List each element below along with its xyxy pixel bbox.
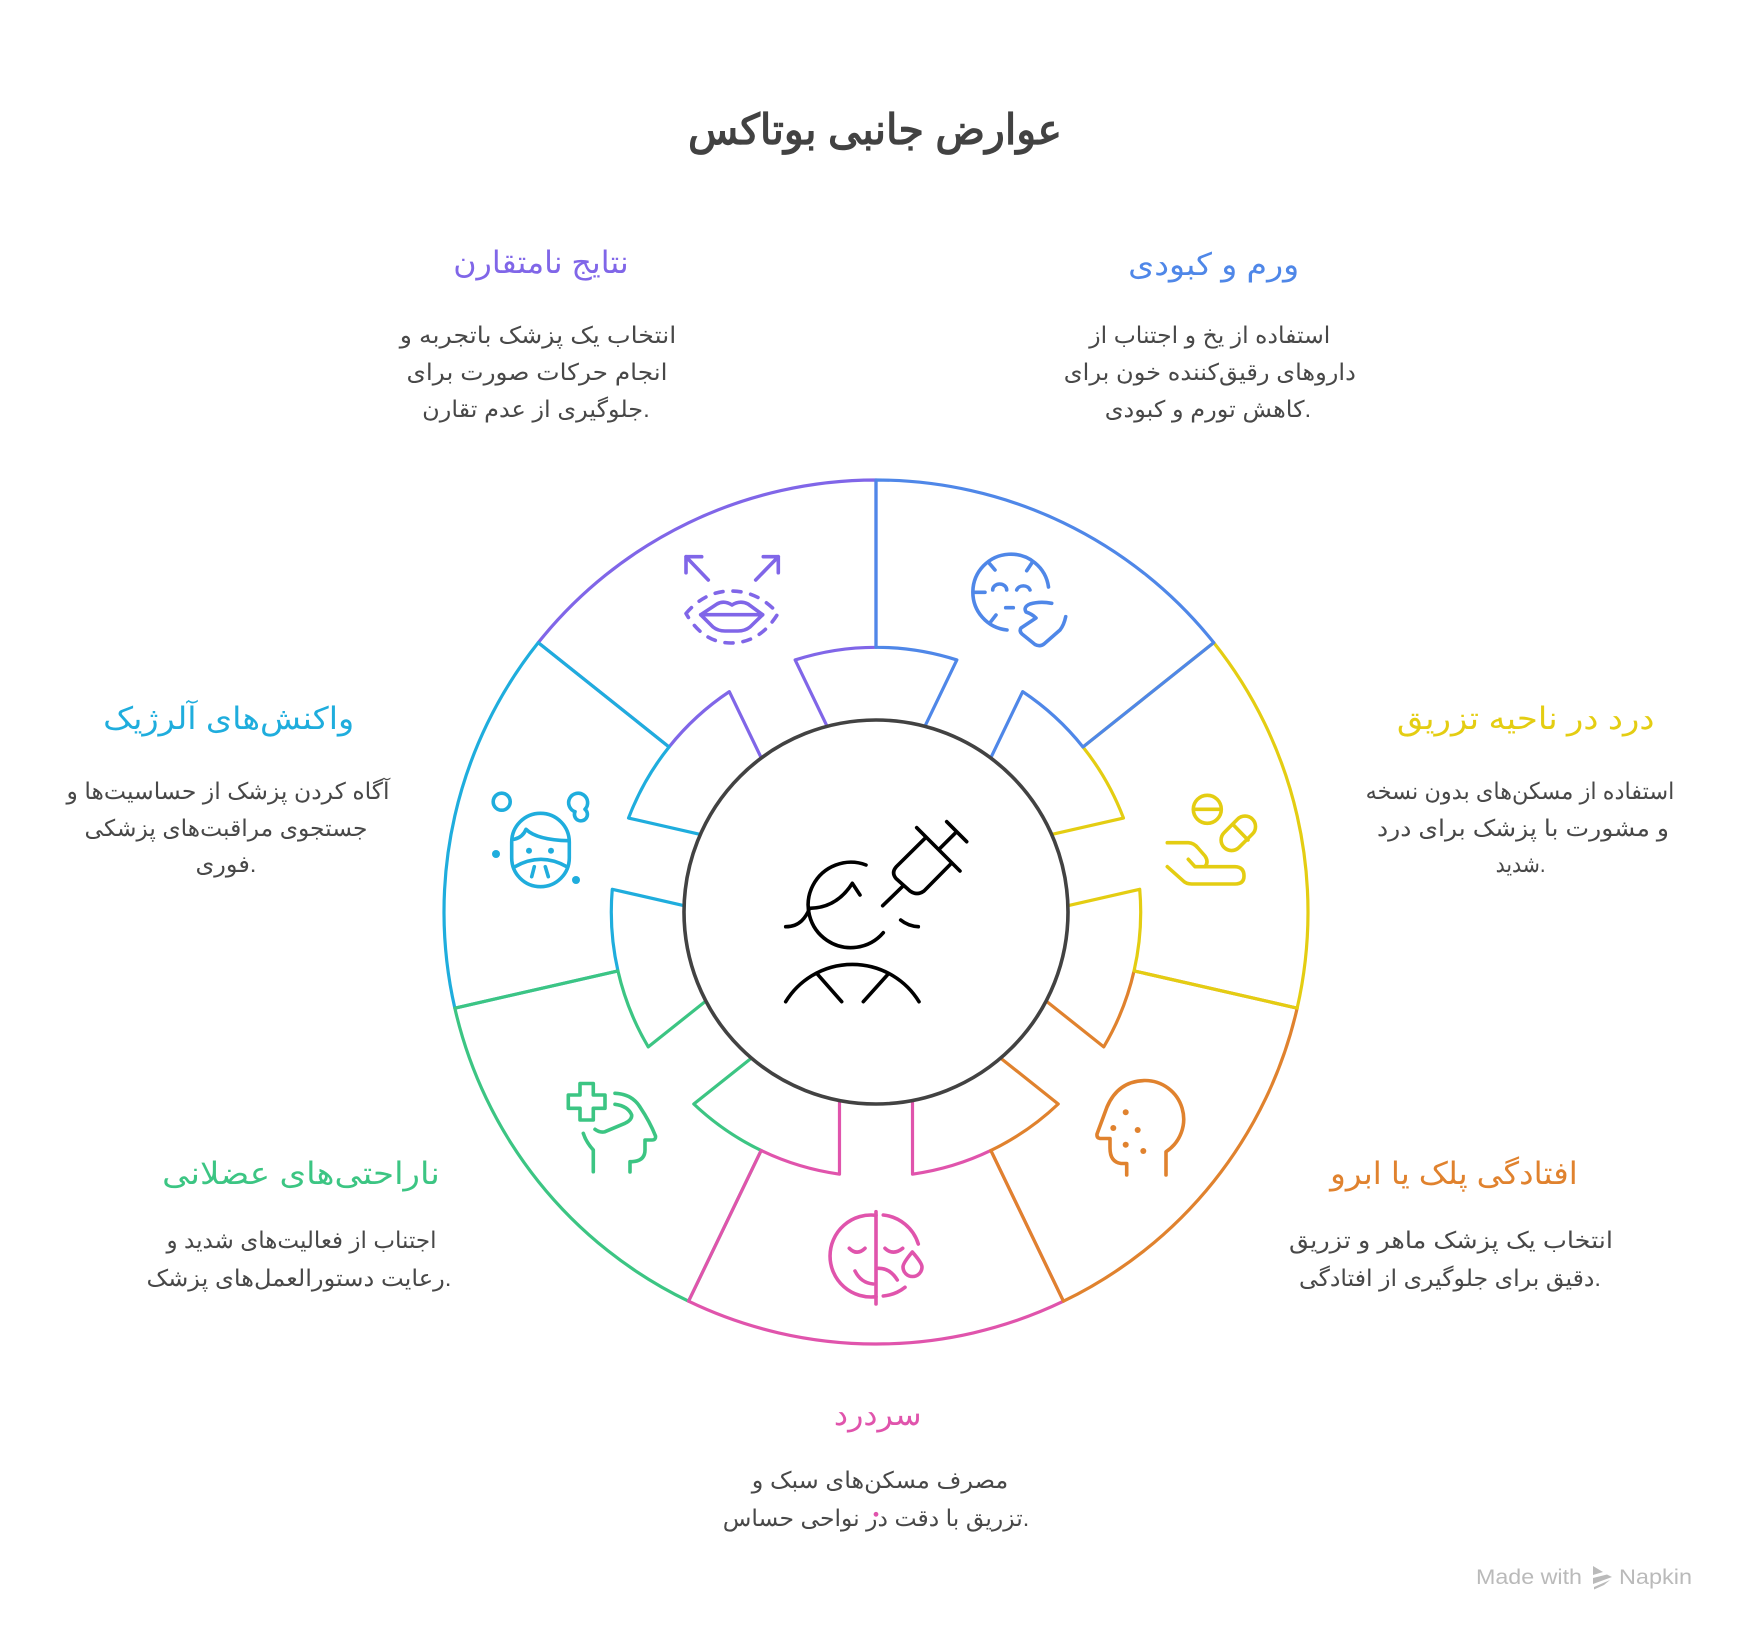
heading: واکنش‌های آلرژیک xyxy=(103,699,354,737)
body: فوری. xyxy=(196,851,256,878)
body: داروهای رقیق‌کننده خون برای xyxy=(1064,359,1356,386)
body xyxy=(399,322,676,423)
body: دقیق برای جلوگیری از افتادگی. xyxy=(1299,1265,1601,1292)
body: شدید. xyxy=(1496,851,1546,877)
heading: افتادگی پلک یا ابرو xyxy=(1328,1156,1578,1192)
body: رعایت دستورالعمل‌های پزشک. xyxy=(146,1265,451,1292)
body: و مشورت با پزشک برای درد xyxy=(1377,815,1669,842)
wheel diagram xyxy=(380,379,1424,1448)
segment: injection site pain (yellow) xyxy=(996,643,1424,1080)
body: آگاه کردن پزشک از حساسیت‌ها و xyxy=(65,777,391,805)
icon: swollen face xyxy=(973,554,1066,646)
text block: swelling and bruising xyxy=(1064,247,1356,423)
icon: allergic face xyxy=(492,793,588,887)
body xyxy=(65,777,391,878)
body xyxy=(1366,778,1674,877)
heading: سردرد xyxy=(834,1397,922,1433)
icon: face and syringe xyxy=(786,822,967,1002)
body: انتخاب یک پزشک ماهر و تزریق xyxy=(1289,1227,1613,1254)
logo mark xyxy=(1593,1566,1612,1590)
icon: half smiling half crying face xyxy=(830,1212,922,1304)
heading: ناراحتی‌های عضلانی xyxy=(162,1156,440,1192)
text block: headache xyxy=(723,1397,1029,1532)
heading: درد در ناحیه تزریق xyxy=(1397,701,1654,737)
segment: eyelid or brow droop (orange) xyxy=(951,946,1297,1337)
body: تزریق با دقت در نواحی حساس. xyxy=(723,1505,1029,1532)
body: کاهش تورم و کبودی. xyxy=(1105,396,1311,423)
watermark: made with napkin: Napkin xyxy=(1619,1566,1692,1589)
watermark: made with napkin xyxy=(1476,1566,1692,1590)
text block: injection site pain xyxy=(1366,701,1674,877)
center circle xyxy=(684,720,1068,1104)
heading: ورم و کبودی xyxy=(1128,247,1299,283)
watermark: made with napkin: Made with xyxy=(1476,1566,1582,1589)
segment: headache (pink) xyxy=(639,1051,1063,1448)
body xyxy=(1289,1227,1613,1292)
heading: نتایج نامتقارن xyxy=(453,245,629,281)
text block: muscle discomfort xyxy=(146,1156,451,1292)
body: استفاده از مسکن‌های بدون نسخه xyxy=(1366,778,1674,805)
body xyxy=(146,1227,451,1292)
title: عوارض جانبی بوتاکس xyxy=(688,106,1062,155)
body: استفاده از یخ و اجتناب از xyxy=(1088,322,1330,349)
body: مصرف مسکن‌های سبک و xyxy=(751,1467,1008,1494)
body: اجتناب از فعالیت‌های شدید و xyxy=(165,1227,437,1254)
body: جلوگیری از عدم تقارن. xyxy=(422,396,650,423)
text block: unbalanced results xyxy=(399,245,676,423)
icon: lips with arrows xyxy=(686,557,778,643)
icon: head with medical cross xyxy=(568,1084,656,1172)
segment: unbalanced results (purple) xyxy=(538,379,966,816)
segment: swelling and bruising (blue) xyxy=(876,480,1214,758)
body: انتخاب یک پزشک باتجربه و xyxy=(399,322,676,349)
icon: hand with pills xyxy=(1167,795,1260,884)
segment: muscle discomfort (green) xyxy=(384,904,809,1301)
body xyxy=(723,1467,1029,1532)
segment: allergic reactions (cyan) xyxy=(380,617,726,1008)
body xyxy=(1064,322,1356,423)
body: انجام حرکات صورت برای xyxy=(406,359,668,386)
text block: eyelid or brow droop xyxy=(1289,1156,1613,1292)
pink dot in headache text xyxy=(874,1512,878,1517)
body: جستجوی مراقبت‌های پزشکی xyxy=(84,815,368,842)
text block: allergic reactions xyxy=(65,699,391,878)
icon: head with spots xyxy=(1097,1080,1184,1175)
